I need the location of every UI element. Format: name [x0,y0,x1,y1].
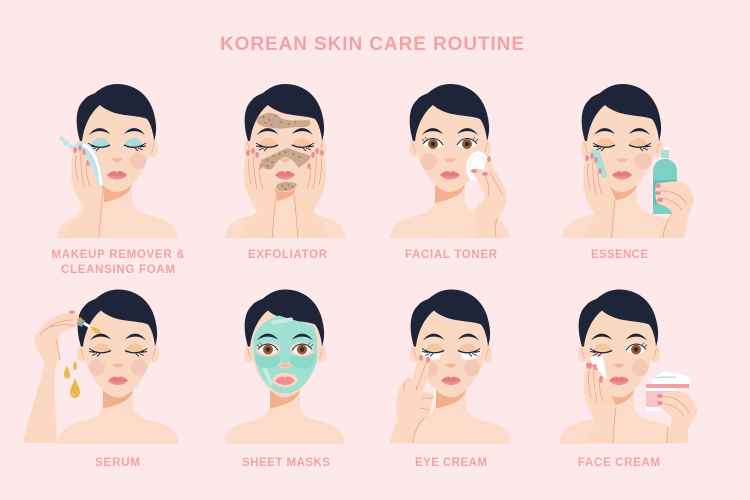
label: MAKEUP REMOVER & [52,249,184,261]
icon: hand applying eye cream [390,355,436,443]
icon: essence bottle [653,147,677,214]
icon: hand [471,156,507,238]
label: EYE CREAM [415,457,487,469]
label: SERUM [95,457,140,469]
icon: dropper [76,318,101,334]
figure: woman applying serum [58,290,178,444]
panel: essence [562,84,694,261]
label: EXFOLIATOR [248,249,328,261]
panel: serum [23,290,178,469]
icon: serum drops [64,360,80,398]
icon: hand holding jar [657,391,697,443]
icon: cream jar [646,371,691,411]
icon: hand right [294,148,326,238]
panel: sheet masks [225,290,345,469]
figure: woman with eye cream [391,290,511,444]
label: FACIAL TONER [405,249,498,261]
panel: face cream [559,290,697,469]
figure: woman with scrub [225,84,345,238]
figure: woman with open eyes [390,84,510,238]
icon: hand holding bottle [655,181,694,238]
panel: makeup remover and cleansing foam [52,84,184,276]
figure: woman with one eye open [559,290,679,444]
figure: woman applying essence [562,84,682,238]
icon: hand with foam [60,136,104,238]
icon: hand with cream [584,356,616,444]
label: ESSENCE [591,249,648,261]
figure: woman wearing sheet mask [225,290,345,444]
panel: facial toner [390,84,510,261]
icon: hand left [244,148,277,238]
title: KOREAN SKIN CARE ROUTINE [220,34,524,55]
icon: hand with pad [583,150,616,238]
panel: eye cream [390,290,511,469]
label: FACE CREAM [578,457,660,469]
figure: woman with blue eyeshadow [57,84,177,238]
label: CLEANSING FOAM [61,264,175,276]
icon: arm and hand [23,310,79,443]
label: SHEET MASKS [242,457,330,469]
panel: exfoliator [225,84,345,261]
icon: cotton pad [464,149,490,183]
